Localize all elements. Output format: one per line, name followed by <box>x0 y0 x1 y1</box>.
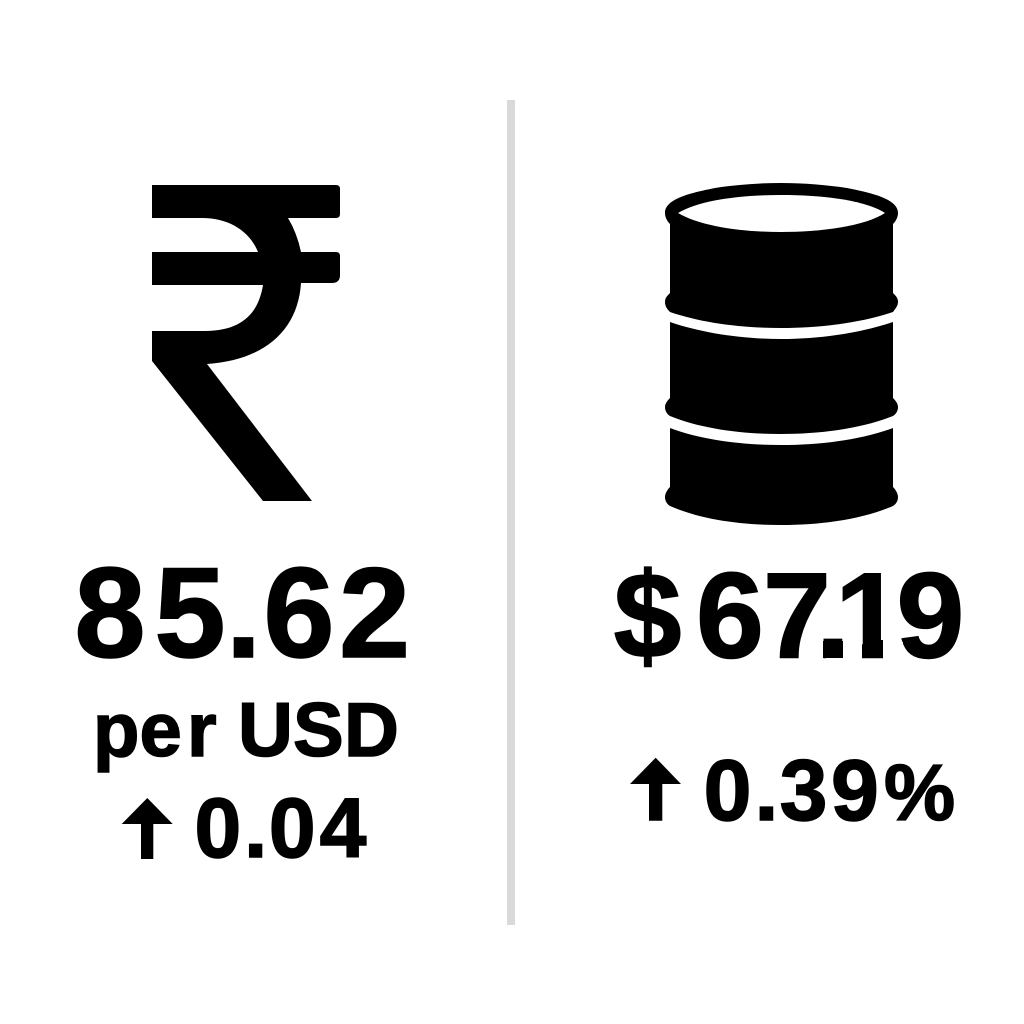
icon: up arrow <box>122 798 173 859</box>
oil price value: $67.19 <box>614 548 964 684</box>
icon: rupee symbol <box>152 185 340 501</box>
exchange rate value: 85.62 <box>74 542 410 685</box>
panel: rupee <box>74 185 410 875</box>
divider <box>507 100 515 925</box>
oil price change: 0.39% <box>704 743 955 839</box>
panel: oil <box>614 183 964 839</box>
rate change: 0.04 <box>194 781 367 875</box>
icon: up arrow <box>630 758 681 821</box>
icon: oil barrel <box>665 183 898 525</box>
unit label: per USD <box>93 688 399 773</box>
